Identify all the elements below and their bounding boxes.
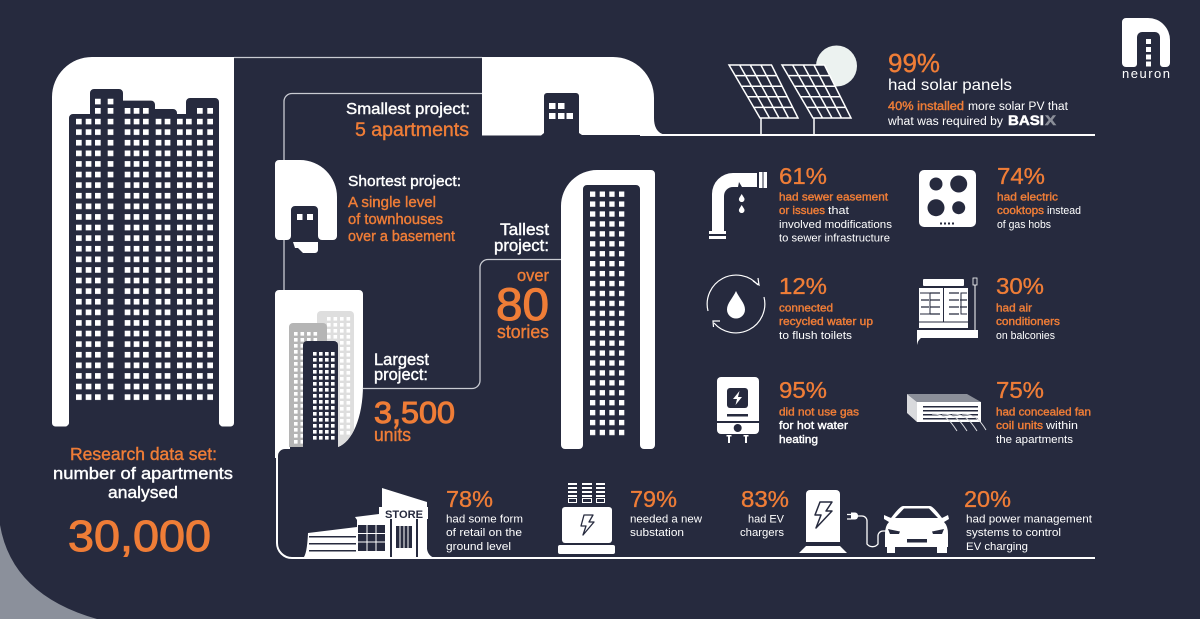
EV charger stat: chargers [740,527,785,539]
icon: recycled water [707,275,765,333]
shortest project label: of townhouses [348,211,443,228]
icon: store: STORE [385,509,423,521]
research data set label: Research data set: [70,444,217,464]
fan coil stat: the apartments [996,434,1074,446]
largest project label: 3,500 [374,395,455,430]
fan coil stat: within [1045,420,1078,432]
tallest project label: Tallest [500,220,549,239]
air conditioner stat: had air [996,303,1032,315]
fan coil stat: coil units [996,420,1044,432]
sewer stat: 61% [779,163,827,189]
smallest project label [346,101,470,141]
sewer stat: involved modifications [779,219,893,231]
substation stat [630,486,702,539]
shortest project label: over a basement [348,228,456,245]
tallest project label: over [517,266,549,285]
sewer stat: or issues [779,205,826,217]
air conditioner stat: conditioners [996,316,1061,328]
solar panel stat [887,48,1069,128]
icon: leaking pipe [709,172,767,239]
solar panel stat: 99% [888,48,940,78]
tallest project label: stories [497,322,549,342]
cooktop stat: of gas hobs [997,219,1051,231]
retail stat: had some form [446,514,523,526]
building: research data set [0,57,240,427]
building: shortest project [275,160,337,253]
solar panel stat: X [1045,112,1057,128]
hot water stat: 95% [779,377,827,403]
research data set label: analysed [108,483,178,502]
fan coil stat [996,377,1091,446]
hot water stat: did not use gas [779,407,860,419]
icon: substation [558,483,615,554]
research data set label: 30,000 [68,512,211,561]
solar panel stat: what was required by [887,116,1003,128]
logo: neuron: neuron [1122,66,1170,81]
shortest project label [348,173,461,245]
tallest project label: 80 [496,279,549,330]
cooktop stat: instead [1047,205,1081,217]
building: smallest project [482,57,668,136]
research data set label: number of apartments [53,464,233,483]
power management stat: 20% [964,486,1011,512]
smallest project label: 5 apartments [355,120,469,141]
air conditioner stat [996,273,1061,342]
shortest project label: Shortest project: [348,173,461,190]
hot water stat: for hot water [779,420,848,432]
tallest project label [494,220,549,342]
fan coil stat: 75% [996,377,1044,403]
retail stat [446,486,523,553]
icon: fan coil unit [907,394,986,431]
solar panel stat: had solar panels [888,77,1012,94]
cooktop stat: had electric [997,192,1059,204]
retail stat: ground level [446,541,511,553]
fan coil stat: had concealed fan [996,407,1091,419]
recycled water stat: recycled water up [779,316,873,328]
recycled water stat: connected [779,303,833,315]
sewer stat: to sewer infrastructure [779,232,890,244]
logo: neuron [1122,18,1170,81]
air conditioner stat: 30% [996,273,1044,299]
building: tallest project [561,170,655,449]
smallest project label: Smallest project: [346,101,470,118]
power management stat: EV charging [966,541,1028,553]
substation stat: needed a new [630,514,702,526]
EV charger stat: had EV [748,514,785,526]
retail stat: of retail on the [446,527,522,539]
power management stat: had power management [966,514,1092,526]
EV charger stat [740,486,789,539]
sewer stat: had sewer easement [779,192,888,204]
largest project label: Largest [374,350,429,369]
air conditioner stat: on balconies [996,330,1055,342]
recycled water stat [779,273,873,342]
EV charger stat: 83% [741,486,789,512]
solar panel stat: more solar PV that [968,101,1069,113]
largest project label: units [374,425,411,445]
research data set label [53,444,233,561]
hot water stat: heating [779,434,818,446]
icon: store [303,488,435,558]
icon: electric cooktop [919,170,976,227]
sewer stat [779,163,893,244]
substation stat: 79% [630,486,677,512]
hot water stat [779,377,860,446]
recycled water stat: to flush toilets [779,330,853,342]
icon: solar panels and sun [729,46,857,135]
largest project label [374,350,455,445]
cooktop stat [997,163,1081,231]
solar panel stat: 40% installed [888,101,964,113]
cooktop stat: 74% [997,163,1045,189]
sewer stat: that [828,205,849,217]
shortest project label: A single level [348,194,436,211]
recycled water stat: 12% [779,273,827,299]
solar panel stat: BASI [1008,112,1044,128]
power management stat [964,486,1092,553]
building: largest project [275,290,363,458]
corner curve [0,525,97,619]
connector lines [234,58,1095,558]
tallest project label: project: [494,236,549,255]
cooktop stat: cooktops [997,205,1045,217]
icon: electric hot water heater [717,377,759,443]
retail stat: 78% [446,486,493,512]
icon: EV charger and car [799,490,949,553]
power management stat: systems to control [966,527,1061,539]
largest project label: project: [374,365,428,384]
icon: balcony air conditioner [917,278,978,345]
substation stat: substation [630,527,684,539]
